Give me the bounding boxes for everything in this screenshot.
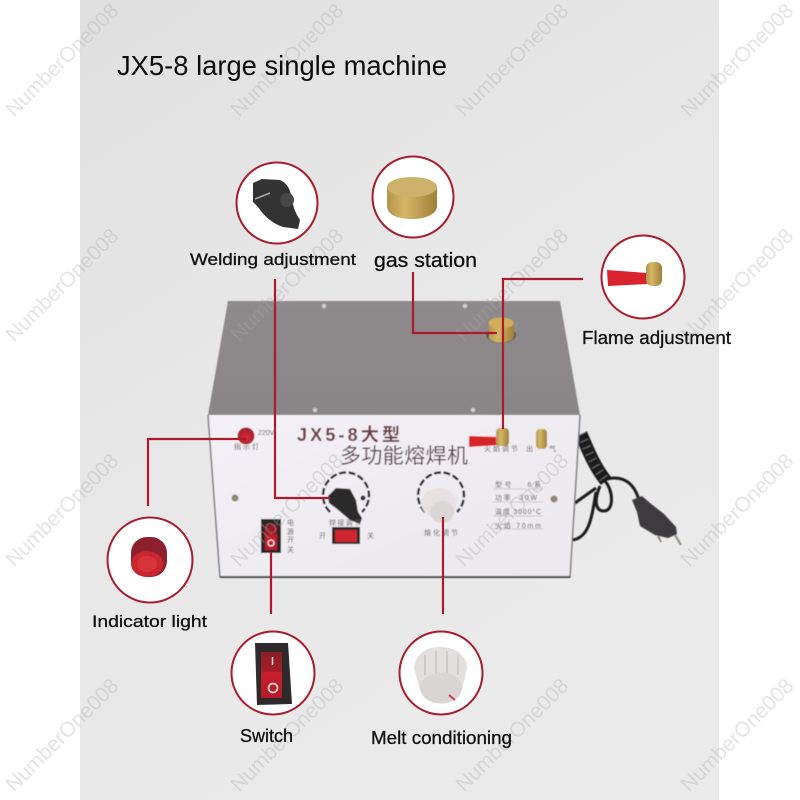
arrow: switch line	[270, 552, 272, 614]
specification table: 功率 30W	[495, 493, 537, 502]
watermarks: NumberOne008	[226, 224, 348, 346]
callout: melt conditioning	[371, 517, 512, 748]
melt dial and knob: 熔化调节	[424, 528, 458, 537]
label: flame adjustment: Flame adjustment	[582, 328, 731, 348]
front panel heading: 多功能熔焊机	[340, 445, 468, 468]
indicator lamp on panel	[234, 428, 275, 451]
arrow: welding line	[275, 279, 330, 498]
horizontal rocker switch: 关	[367, 531, 374, 540]
icon: red valve handle	[602, 236, 684, 318]
front panel heading: JX5-8大型	[297, 425, 400, 445]
callout: indicator light	[92, 439, 246, 631]
power switch on panel	[261, 518, 294, 554]
watermarks: NumberOne008	[1, 0, 123, 121]
watermarks: NumberOne008	[451, 449, 573, 571]
icon: brass cap	[372, 156, 454, 238]
watermarks: NumberOne008	[226, 674, 348, 796]
power switch on panel: 源	[287, 527, 294, 536]
watermarks: NumberOne008	[226, 449, 348, 571]
gas outlet on panel: 出 气	[526, 444, 556, 453]
arrow: gas line	[413, 272, 497, 333]
specification table: 型号 6系	[495, 480, 541, 489]
arrow: melt line	[442, 517, 444, 614]
watermarks: NumberOne008	[676, 224, 798, 346]
machine	[208, 301, 681, 577]
label: melt conditioning: Melt conditioning	[371, 728, 512, 748]
welding dial and knob: 焊接调节	[329, 518, 361, 527]
panel screws	[232, 494, 558, 502]
horizontal rocker switch	[319, 527, 374, 544]
watermarks: NumberOne008	[676, 674, 798, 796]
watermarks: NumberOne008	[1, 674, 123, 796]
watermarks: NumberOne008	[676, 449, 798, 571]
icon: white knob	[400, 632, 482, 714]
machine front panel	[208, 415, 580, 577]
watermarks: NumberOne008	[451, 674, 573, 796]
icon: red indicator lamp	[108, 518, 192, 602]
specification table: 火焰 70mm	[495, 521, 541, 530]
label: indicator light: Indicator light	[92, 612, 207, 631]
power switch on panel: 关	[287, 545, 294, 554]
welding dial and knob	[323, 472, 369, 527]
callout: switch	[232, 552, 314, 746]
gas outlet on panel	[526, 429, 556, 453]
flame valve on panel	[469, 428, 518, 453]
arrow: indicator line	[148, 439, 246, 506]
icon: welding knob	[236, 162, 318, 244]
label: switch: Switch	[240, 726, 293, 746]
indicator lamp on panel: 指示灯	[234, 442, 259, 451]
label: gas station: gas station	[374, 250, 477, 272]
gas station cap on machine	[486, 318, 516, 343]
title: JX5-8 large single machine	[117, 50, 447, 81]
watermarks: NumberOne008	[451, 0, 573, 121]
horizontal rocker switch: 开	[319, 532, 326, 540]
icon: rocker switch	[232, 632, 314, 714]
watermarks: NumberOne008	[226, 0, 348, 121]
arrow: flame line	[503, 279, 583, 429]
callout: gas station	[372, 156, 497, 333]
power cord and plug	[572, 434, 681, 545]
callout: welding adjustment	[190, 162, 356, 498]
specification table: 温度 3000°C	[495, 507, 541, 516]
watermarks: NumberOne008	[1, 449, 123, 571]
watermarks: NumberOne008	[451, 224, 573, 346]
callout: flame adjustment	[503, 236, 731, 429]
melt dial and knob	[418, 472, 464, 537]
power switch on panel: 开	[287, 536, 294, 544]
flame valve on panel: 火焰调节	[484, 444, 518, 453]
watermarks: NumberOne008	[676, 0, 798, 121]
watermarks: NumberOne008	[1, 224, 123, 346]
machine top panel	[208, 301, 580, 415]
indicator lamp on panel: 220V	[258, 430, 275, 437]
specification table	[493, 480, 543, 530]
label: welding adjustment: Welding adjustment	[190, 250, 356, 269]
front panel heading	[297, 425, 468, 468]
power switch on panel: 电	[287, 518, 294, 527]
